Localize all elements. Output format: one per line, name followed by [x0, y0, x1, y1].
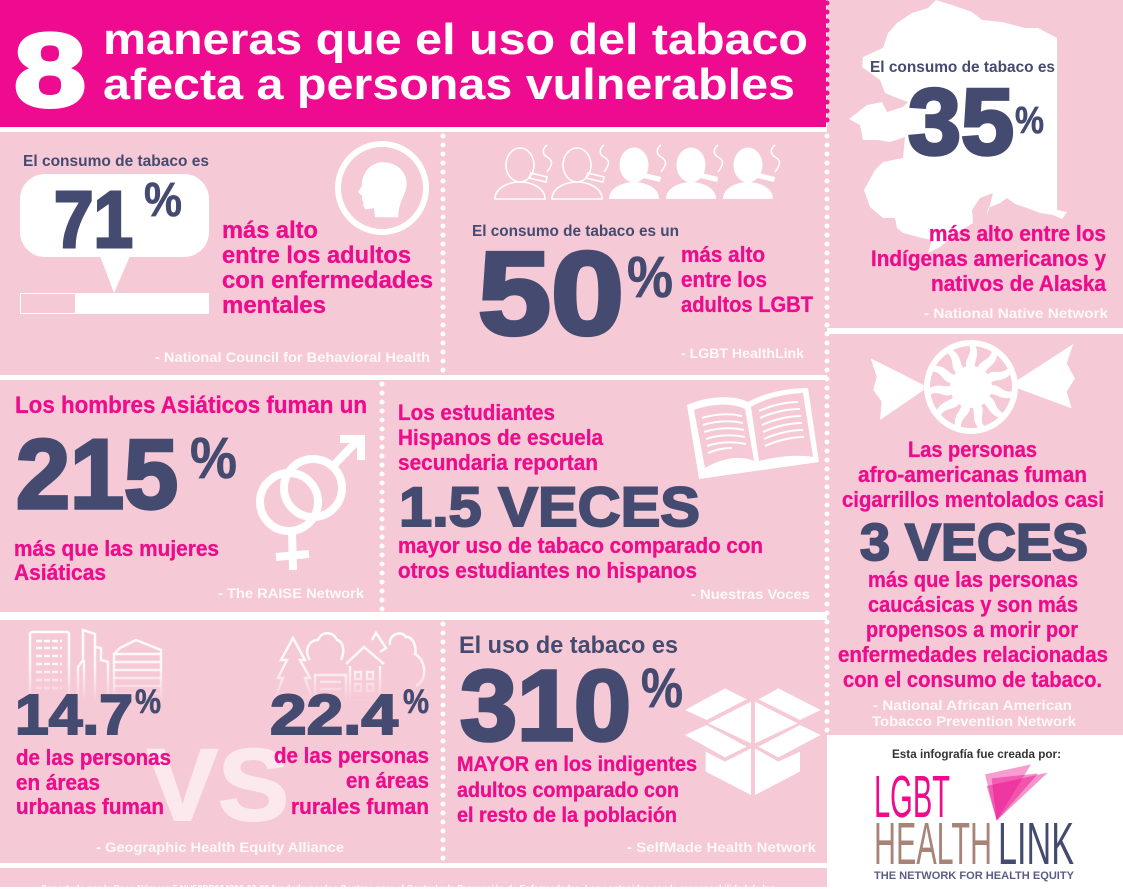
VS watermark: VS: [147, 728, 289, 842]
text: los estudiantes: Los estudiantes: [398, 400, 555, 425]
text: mayor uso de tabaco: otros estudiantes no hispanos: [398, 558, 697, 583]
panel: credit and logo: [827, 735, 1123, 889]
panel: African American menthol: [838, 343, 1108, 729]
text: más alto entre los adultos: [222, 217, 433, 319]
text: más alto entre los adultos: con enfermedades: [222, 267, 433, 294]
logo wordmark: THE NETWORK FOR HEALTH EQUITY: [874, 870, 1075, 882]
text: las personas afro-americanas: cigarrillos mentolados casi: [842, 487, 1104, 512]
icon: gender symbols: [260, 439, 361, 570]
number 71%: [54, 174, 182, 264]
text: mayor en los indigentes: MAYOR en los indigentes: [457, 753, 697, 776]
text: rurales: de las personas: [274, 743, 429, 768]
text: más que las mujeres: Asiáticas: [14, 560, 106, 585]
intro text: El consumo de tabaco es: [23, 153, 209, 170]
source: - SelfMade Health Network: [627, 840, 817, 855]
panel: mental illness 71%: [20, 144, 433, 365]
text: rurales: en áreas: [346, 768, 429, 793]
title banner: 8: [14, 13, 86, 129]
number 71%: 71: [54, 175, 133, 264]
number 50%: %: [627, 245, 673, 310]
text: más alto entre los indígenas: nativos de Alaska: [931, 271, 1107, 296]
text: mayor en los indigentes: [457, 753, 697, 827]
text: más alto entre los adultos: más alto: [222, 217, 318, 244]
number 22.4%: %: [403, 683, 429, 721]
intro text: El consumo de tabaco es: [870, 59, 1055, 76]
number 71%: %: [144, 174, 182, 227]
source: - National Council for Behavioral Health: [155, 350, 430, 365]
text: urbanas: en áreas: [16, 770, 100, 795]
number 35%: 35: [908, 69, 1014, 174]
title banner: [0, 0, 826, 129]
text: más que las personas caucásicas: [838, 567, 1108, 692]
text: urbanas: urbanas fuman: [16, 794, 164, 819]
logo wordmark: [874, 764, 1075, 882]
text: más que las personas caucásicas: enfermedades relacionadas: [838, 642, 1108, 667]
number 310%: 310: [460, 650, 631, 762]
text: mayor en los indigentes: el resto de la población: [457, 804, 677, 827]
credit text: Esta infografía fue creada por:: [892, 747, 1061, 761]
title banner: afecta a personas vulnerables: [103, 60, 795, 109]
text: más alto entre los adultos LGBT: adultos LGBT: [681, 292, 814, 317]
text: más alto entre los adultos: entre los adultos: [222, 242, 411, 269]
number 3 VECES: 3 VECES: [860, 514, 1088, 572]
icon: map of Alaska: [849, 0, 1067, 253]
source: - The RAISE Network: [218, 586, 365, 601]
text: más que las mujeres: más que las mujeres: [14, 536, 219, 561]
text: mayor en los indigentes: adultos comparado con: [457, 779, 679, 802]
panel: Hispanic students 1.5 veces: [398, 388, 819, 602]
speech bubble with progress bar: [20, 174, 209, 314]
source: [872, 698, 1077, 729]
panel: urban vs rural: [15, 630, 429, 855]
icon: menthol candy: [871, 343, 1075, 431]
logo wordmark: HEALTH: [874, 811, 992, 877]
text: más alto entre los indígenas: [871, 221, 1107, 296]
icon: head in circle: [338, 144, 426, 232]
source: Tobacco Prevention Network: [872, 714, 1077, 729]
icon: rural trees and house: [275, 633, 424, 700]
text: mayor uso de tabaco: mayor uso de tabaco comparado con: [398, 533, 763, 558]
number 14.7%: %: [135, 683, 161, 721]
text: más que las personas caucásicas: más que las personas: [868, 567, 1078, 592]
number 215%: %: [190, 426, 237, 491]
number 50%: [478, 228, 673, 360]
heading: El uso de tabaco es: [459, 632, 678, 659]
panel: LGBT 50%: [472, 145, 814, 361]
source: - Geographic Health Equity Alliance: [96, 840, 345, 855]
text: urbanas: de las personas: [16, 745, 171, 770]
text: más alto entre los indígenas: Indígenas americanos y: [871, 246, 1107, 271]
icon: open box: [685, 688, 821, 795]
panel: Native Alaska 35%: [849, 0, 1109, 321]
text: más alto entre los adultos: mentales: [222, 292, 326, 319]
source: - National African American: [873, 698, 1072, 713]
title banner: maneras que el uso del tabaco: [103, 15, 808, 64]
intro text: El consumo de tabaco es un: [472, 223, 679, 240]
text: las personas afro-americanas: afro-americanas fuman: [858, 462, 1087, 487]
icon: city buildings: [30, 630, 161, 704]
logo triangles: [985, 764, 1048, 821]
text: más alto entre los adultos LGBT: [681, 242, 814, 317]
number 50%: 50: [478, 228, 624, 360]
number 1.5 VECES: 1.5 VECES: [399, 475, 700, 538]
text: más que las personas caucásicas: caucásicas y son más: [868, 592, 1078, 617]
text: las personas afro-americanas: [842, 437, 1104, 512]
icon: open book: [687, 388, 819, 479]
text: las personas afro-americanas: Las personas: [908, 437, 1037, 462]
text: mayor uso de tabaco: [398, 533, 763, 583]
text: más alto entre los adultos LGBT: más alto: [681, 242, 765, 267]
source: - LGBT HealthLink: [681, 346, 805, 361]
number 22.4%: [270, 683, 429, 747]
text: los estudiantes: [398, 400, 604, 475]
text: los estudiantes: secundaria reportan: [398, 450, 598, 475]
number 310%: %: [641, 656, 683, 719]
panel: Asian men 215%: [14, 392, 367, 601]
text: rurales: rurales fuman: [291, 794, 429, 819]
text: los estudiantes: Hispanos de escuela: [398, 425, 604, 450]
text: más alto entre los adultos LGBT: entre los: [681, 267, 767, 292]
text: rurales: [274, 743, 429, 819]
text: más alto entre los indígenas: más alto entre los: [929, 221, 1106, 246]
number 215%: 215: [16, 419, 178, 529]
text: urbanas: [16, 745, 171, 819]
number 35%: %: [1015, 100, 1044, 142]
text: más que las mujeres: [14, 536, 219, 585]
text: más que las personas caucásicas: propensos a morir por: [866, 617, 1078, 642]
number 22.4%: 22.4: [270, 683, 398, 747]
source: - National Native Network: [924, 306, 1109, 321]
heading: Los hombres Asiáticos fuman un: [15, 392, 367, 419]
source: - Nuestras Voces: [691, 587, 810, 602]
panel: homeless 310%: [457, 632, 821, 855]
icon: five smokers: [495, 145, 780, 199]
text: más que las personas caucásicas: con el consumo de tabaco.: [843, 667, 1102, 692]
logo wordmark: LGBT: [874, 764, 950, 830]
number 14.7%: 14.7: [15, 683, 133, 747]
